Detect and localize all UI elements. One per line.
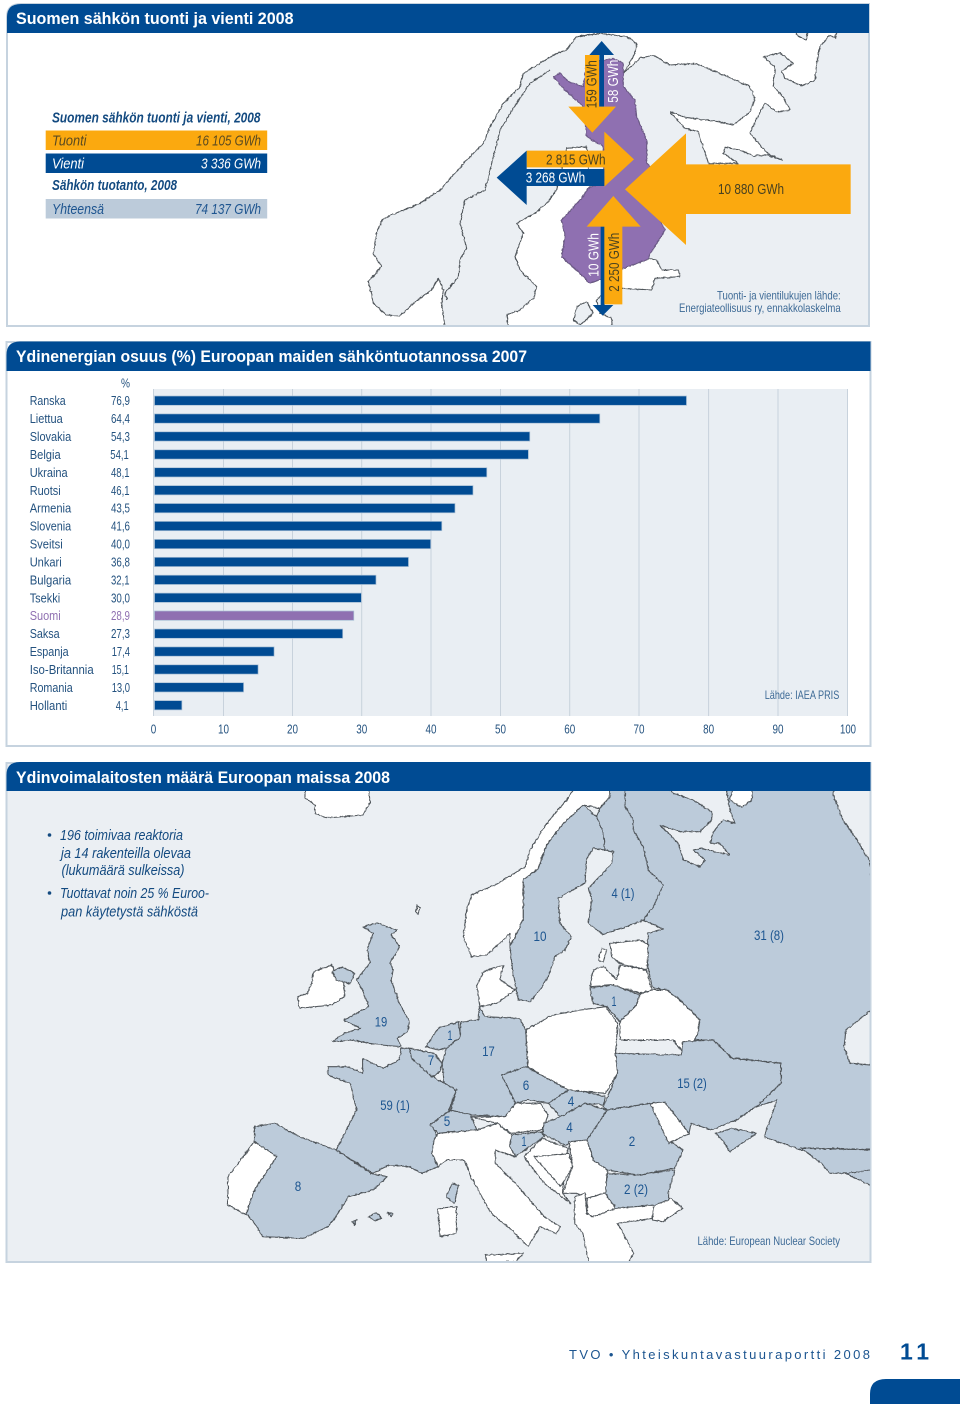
- flow labels: 159 GWh: [584, 60, 601, 108]
- x axis scale: [151, 722, 856, 736]
- portugal: [228, 1142, 277, 1215]
- x axis scale: 90: [772, 722, 784, 736]
- percentage values: %: [121, 376, 130, 390]
- romania: [587, 1103, 683, 1175]
- belgium: [410, 1048, 442, 1077]
- bulgaria: [605, 1170, 675, 1208]
- flow labels: 2 815 GWh: [546, 152, 606, 168]
- reactor counts by country: 2: [629, 1133, 635, 1149]
- flow labels: 3 268 GWh: [526, 170, 585, 186]
- x axis scale: 70: [634, 722, 645, 736]
- latvia: [590, 965, 652, 993]
- france: [328, 1048, 456, 1173]
- legend table: Sähkön tuotanto, 2008: [52, 178, 178, 194]
- reactor counts by country: 17: [482, 1043, 495, 1059]
- percentage values: 64,4: [111, 412, 130, 426]
- heading: import and export: [7, 4, 869, 33]
- country labels: Ruotsi: [30, 484, 61, 498]
- legend table: 16 105 GWh: [196, 134, 261, 150]
- percentage values: 54,3: [111, 430, 130, 444]
- reactor counts by country: 8: [295, 1178, 301, 1194]
- country labels: Romania: [30, 681, 73, 695]
- legend table: 3 336 GWh: [201, 156, 261, 172]
- moldova: [650, 1102, 689, 1143]
- reactor counts by country: 1: [448, 1027, 453, 1043]
- x axis scale: 0: [151, 722, 156, 736]
- caucasus: [801, 1148, 883, 1173]
- country labels: Ukraina: [30, 466, 68, 480]
- country labels: Unkari: [30, 556, 62, 570]
- reactor counts by country: 15 (2): [677, 1075, 707, 1091]
- italy: [432, 1123, 560, 1247]
- panel: Finnish electricity import and export: [0, 4, 870, 350]
- percentage values: 76,9: [111, 394, 130, 408]
- switzerland: [430, 1110, 477, 1133]
- arrow: import from Norway: [568, 55, 616, 133]
- reactor counts by country: 59 (1): [380, 1097, 410, 1113]
- source note: European Nuclear Society: Lähde: European Nuclear Society: [698, 1235, 840, 1248]
- austria: [471, 1103, 548, 1133]
- percentage values: 4,1: [116, 699, 129, 713]
- x axis scale: 20: [287, 722, 298, 736]
- map: Fennoscandia with Finland highlighted: [367, 33, 868, 325]
- belarus: [620, 990, 700, 1060]
- flow labels: 2 250 GWh: [606, 233, 623, 292]
- source note: import and export figures: Tuonti- ja vientilukujen lähde:: [717, 290, 841, 302]
- heading: nuclear plants: Ydinvoimalaitosten määrä Euroopan maissa 2008: [16, 768, 390, 787]
- x axis scale: 60: [564, 722, 575, 736]
- arrow: export to Norway: [589, 41, 614, 107]
- ukraine: [603, 1040, 781, 1133]
- ireland: [297, 965, 344, 1008]
- percentage values: 43,5: [111, 502, 130, 516]
- greece: [575, 1193, 654, 1263]
- reactor counts by country: 4: [566, 1119, 573, 1135]
- arrow: import from Sweden: [527, 132, 634, 187]
- heading: nuclear share: Ydinenergian osuus (%) Euroopan maiden sähköntuotannossa 2007: [16, 347, 527, 366]
- spain: [246, 1123, 387, 1238]
- footer: [569, 1338, 960, 1404]
- country labels: Slovakia: [30, 430, 71, 444]
- reactor counts by country: 10: [534, 928, 547, 944]
- poland: [526, 1007, 618, 1093]
- percentage values: 17,4: [112, 645, 130, 659]
- text block: key facts: 196 toimivaa reaktoria: [60, 828, 183, 844]
- great britain: [332, 923, 410, 1047]
- iceland: [304, 791, 371, 818]
- arrow: export to Sweden: [497, 151, 604, 205]
- percentage values: 40,0: [111, 538, 130, 552]
- reactor counts by country: 5: [444, 1113, 450, 1129]
- croatia and bosnia: [524, 1138, 571, 1203]
- czech republic: [501, 1067, 569, 1103]
- country labels: Slovenia: [30, 520, 71, 534]
- text block: key facts: Tuottavat noin 25 % Euroo-: [60, 886, 209, 902]
- reactor counts by country: 1: [522, 1133, 527, 1149]
- legend table: Yhteensä: [52, 202, 104, 218]
- reactor counts by country: 7: [428, 1052, 434, 1068]
- text block: key facts: (lukumäärä sulkeissa): [62, 863, 184, 879]
- bar chart: [153, 389, 848, 716]
- hungary: [542, 1103, 607, 1145]
- estonia: [610, 940, 648, 970]
- reactor counts by country: 1: [612, 993, 617, 1009]
- percentage values: 41,6: [111, 520, 130, 534]
- text block: key facts: [48, 828, 209, 920]
- percentage values: 36,8: [111, 556, 130, 570]
- reactor counts by country: 4: [568, 1093, 574, 1109]
- country labels: Suomi: [30, 609, 61, 623]
- country labels: Armenia: [30, 502, 71, 516]
- reactor counts by country: 4 (1): [612, 885, 634, 901]
- legend table: Vienti: [52, 156, 85, 172]
- footer: 11: [900, 1338, 929, 1364]
- flow labels: 10 880 GWh: [718, 181, 784, 198]
- russia: [625, 775, 880, 1150]
- country labels: Ranska: [30, 394, 66, 408]
- legend table: [46, 110, 267, 218]
- flow labels: 58 GWh: [605, 60, 622, 103]
- arrow: import from Russia: [625, 133, 851, 245]
- country labels: Liettua: [30, 412, 63, 426]
- percentage values: 48,1: [111, 466, 130, 480]
- panel: nuclear share bar chart: [6, 342, 870, 746]
- panel: nuclear plants in Europe: [6, 762, 883, 1263]
- footer: TVO • Yhteiskuntavastuuraportti 2008: [569, 1347, 870, 1362]
- x axis scale: 10: [218, 722, 229, 736]
- country labels: Hollanti: [30, 699, 67, 713]
- serbia: [563, 1140, 607, 1198]
- country labels: Tsekki: [30, 591, 60, 605]
- turkey: [652, 1198, 683, 1222]
- arrow: import from Estonia: [587, 196, 641, 304]
- percentage values: 54,1: [110, 448, 129, 462]
- legend table: Suomen sähkön tuonti ja vienti, 2008: [52, 110, 261, 126]
- source note: IAEA: Lähde: IAEA PRIS: [765, 689, 839, 702]
- flow labels: [526, 60, 784, 292]
- flow labels: 10 GWh: [586, 233, 603, 277]
- percentage values: 46,1: [111, 484, 130, 498]
- germany: [442, 1007, 528, 1117]
- text block: key facts: ja 14 rakenteilla olevaa: [59, 846, 191, 862]
- slovenia: [509, 1132, 544, 1157]
- x axis scale: 50: [495, 722, 506, 736]
- percentage values: 13,0: [112, 681, 130, 695]
- country labels: Bulgaria: [30, 573, 71, 587]
- finland: [588, 773, 663, 935]
- lithuania: [590, 985, 640, 1022]
- heading: import and export: Suomen sähkön tuonti ja vienti 2008: [16, 9, 294, 28]
- sweden: [510, 805, 605, 1002]
- country labels: Belgia: [30, 448, 61, 462]
- heading: nuclear plants: [6, 762, 870, 791]
- x axis scale: 30: [356, 722, 367, 736]
- norway: [463, 773, 610, 957]
- country labels: [30, 394, 94, 713]
- percentage values: 15,1: [112, 663, 129, 677]
- source note: import and export figures: Energiateollisuus ry, ennakkolaskelma: [679, 302, 841, 315]
- percentage values: 27,3: [111, 627, 130, 641]
- country labels: Saksa: [30, 627, 60, 641]
- reactor counts by country: 31 (8): [754, 927, 784, 943]
- heading: nuclear share: [6, 342, 870, 371]
- text block: key facts: pan käytetystä sähköstä: [60, 904, 198, 920]
- denmark: [477, 965, 515, 1007]
- legend table: 74 137 GWh: [195, 202, 261, 218]
- percentage values: 32,1: [111, 573, 130, 587]
- legend table: Tuonti: [52, 134, 87, 150]
- white sea: [660, 791, 736, 868]
- percentage values: 30,0: [111, 591, 130, 605]
- x axis scale: 80: [703, 722, 714, 736]
- reactor counts by country: 19: [375, 1014, 387, 1030]
- percentage values: 28,9: [111, 609, 130, 623]
- percentage values: [110, 376, 130, 713]
- x axis scale: 40: [426, 722, 437, 736]
- x axis scale: 100: [840, 722, 856, 736]
- netherlands: [426, 1022, 461, 1050]
- source note: import and export figures: [679, 290, 841, 315]
- country labels: Espanja: [30, 645, 69, 659]
- reactor counts by country: 2 (2): [624, 1181, 648, 1197]
- reactor counts by country: [295, 885, 784, 1197]
- arrow: export to Estonia: [593, 227, 613, 316]
- map: Europe by country: [228, 773, 883, 1263]
- slovakia: [548, 1090, 605, 1117]
- reactor counts by country: 6: [523, 1077, 529, 1093]
- country labels: Sveitsi: [30, 538, 63, 552]
- country labels: Iso-Britannia: [30, 663, 94, 677]
